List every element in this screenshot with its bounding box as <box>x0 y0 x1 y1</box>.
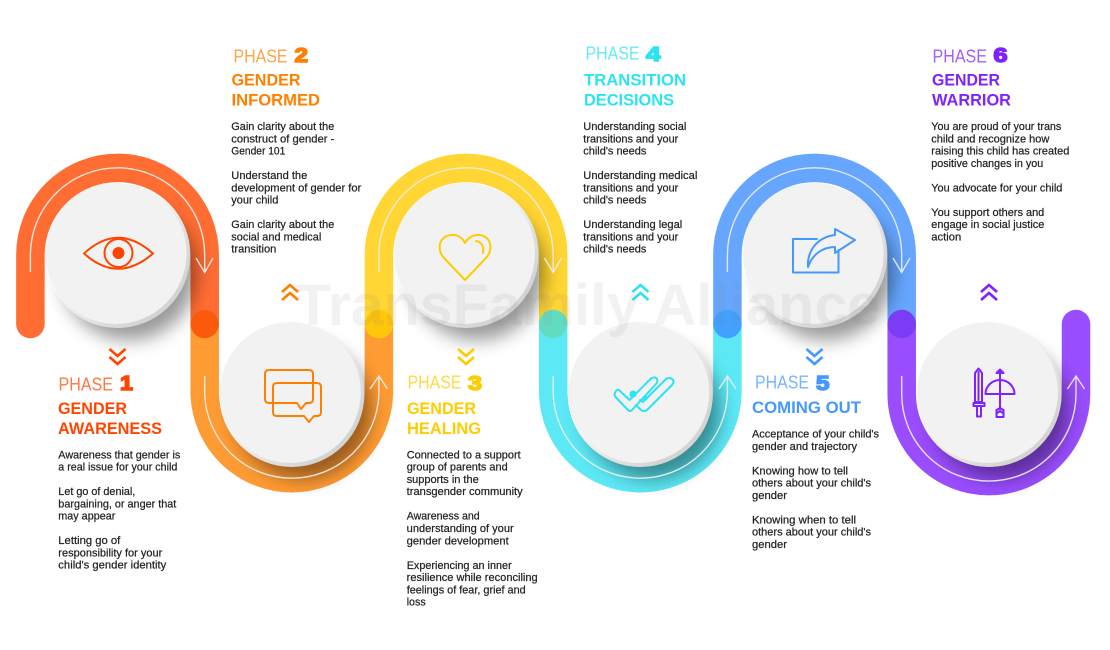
phase 3 body: supports in the <box>407 474 479 486</box>
phase 5 text <box>752 372 879 551</box>
phase 1 text <box>58 373 181 572</box>
phase 4 body: child's needs <box>583 195 647 207</box>
phase 4 heading: DECISIONS <box>584 90 674 110</box>
phase 5 body: others about your child's <box>752 478 871 490</box>
chevrons: phase 3 <box>458 349 474 364</box>
phase 6 heading: WARRIOR <box>932 90 1011 110</box>
icon: speech bubbles <box>265 370 321 422</box>
phase 4 label: PHASE <box>586 44 640 64</box>
phase 2 body: Gender 101 <box>231 146 285 158</box>
arrow line: phase 6 <box>902 376 1084 481</box>
phase 3 body: group of parents and <box>407 462 508 474</box>
phase 3 label: 3 <box>468 373 482 395</box>
icon: sword and arrow <box>974 368 1014 417</box>
icon: eye <box>84 238 153 269</box>
chevrons: phase 1 <box>110 349 126 364</box>
phase 6 body: child and recognize how <box>931 133 1049 145</box>
arrow line: phase 3 <box>379 168 562 272</box>
path band: phase 1 <box>30 168 205 324</box>
phase 2 body: your child <box>231 195 278 207</box>
phase 3 text <box>407 372 538 609</box>
phase 3 heading: GENDER <box>407 399 476 418</box>
phase 3 body: Awareness and <box>407 511 480 523</box>
phase 2 body: development of gender for <box>231 182 362 194</box>
phase 5 body: others about your child's <box>752 527 871 539</box>
band junction: orange-yellow <box>365 310 393 338</box>
phase 4 body: Understanding legal <box>583 219 682 231</box>
phase 3 body: Experiencing an inner <box>407 560 512 572</box>
icon: double check <box>614 377 674 411</box>
path band: phase 2 <box>205 324 379 478</box>
phase 1 body: Awareness that gender is <box>58 449 181 461</box>
disc: phase 5 <box>742 183 887 328</box>
phase 1 label: 1 <box>120 373 133 395</box>
phase 2 body <box>231 121 362 256</box>
phase 3 body: feelings of fear, grief and <box>407 584 526 596</box>
phase 4 text <box>583 44 697 256</box>
chevrons: phase 4 <box>632 285 648 300</box>
phase 4 body: transitions and your <box>583 231 679 243</box>
phase 5 label: 5 <box>816 373 830 395</box>
phase 2 label: PHASE <box>234 46 288 66</box>
phase 6 body: You advocate for your child <box>931 182 1062 194</box>
phase 3 heading: HEALING <box>407 419 481 438</box>
phase 5 label: PHASE <box>755 372 809 392</box>
phase 6 heading <box>932 70 1011 110</box>
arrow line: phase 2 <box>205 376 388 478</box>
phase 4 body: transitions and your <box>583 182 679 194</box>
phase 6 heading: GENDER <box>932 70 1000 90</box>
phase 2 heading <box>232 70 320 110</box>
phase 3 body: understanding of your <box>407 523 514 535</box>
phase 2 body: Gain clarity about the <box>231 219 334 231</box>
phase 5 body: Knowing how to tell <box>752 465 848 477</box>
phase 6 body: action <box>931 232 961 244</box>
phase 4 body: child's needs <box>583 244 647 256</box>
disc: phase 1 <box>45 183 190 328</box>
phase 2 body: transition <box>231 244 276 256</box>
phase 1 body: bargaining, or anger that <box>58 498 176 510</box>
phase 2 heading: GENDER <box>232 70 300 90</box>
phase 5 body: Acceptance of your child's <box>752 429 879 441</box>
phase 1 heading: AWARENESS <box>58 419 162 438</box>
path band: phase 4 <box>553 324 727 478</box>
phase 1 heading: GENDER <box>58 399 127 418</box>
phase 5 heading: COMING OUT <box>752 398 862 417</box>
phase 3 body: resilience while reconciling <box>407 572 538 584</box>
phase 1 body <box>58 449 181 572</box>
disc: phase 2 <box>219 322 364 467</box>
phase 1 body: a real issue for your child <box>58 462 177 474</box>
path band: phase 6 <box>902 324 1076 481</box>
phase 4 body: child's needs <box>583 146 647 158</box>
phase 4 body: Understanding medical <box>583 170 697 182</box>
phase 1 body: Letting go of <box>58 535 121 547</box>
phase 4 label: 4 <box>646 44 662 66</box>
phase 4 body: Understanding social <box>583 121 686 133</box>
phase 3 body: transgender community <box>407 486 523 498</box>
phase 1 label: PHASE <box>58 374 113 394</box>
phase 5 body: gender and trajectory <box>752 441 858 453</box>
phase 3 heading <box>407 399 481 438</box>
phase 6 body: You are proud of your trans <box>931 121 1062 133</box>
phase 6 body: engage in social justice <box>931 219 1044 231</box>
disc: phase 6 <box>916 322 1061 467</box>
watermark: TransFamily Alliance <box>295 273 880 338</box>
phase 6 body: You support others and <box>931 207 1044 219</box>
phase 6 body: positive changes in you <box>931 158 1043 170</box>
phase 6 label: PHASE <box>932 46 987 66</box>
phase 6 text <box>931 45 1069 244</box>
phase 3 label: PHASE <box>408 372 462 392</box>
circle shadows <box>61 204 1068 479</box>
path band: phase 3 <box>379 168 553 324</box>
phase 3 body: Connected to a support <box>407 449 521 461</box>
chevrons: phase 5 <box>806 349 822 364</box>
phase 2 body: social and medical <box>231 231 321 243</box>
phase 5 body <box>752 429 879 551</box>
path band: phase 5 <box>727 168 902 324</box>
arrow line: phase 1 <box>30 168 213 272</box>
phase 5 body: gender <box>752 539 787 551</box>
chevrons: phase 2 <box>282 285 298 300</box>
phase 4 body: transitions and your <box>583 133 679 145</box>
phase 3 body <box>407 449 538 609</box>
phase 2 body: construct of gender - <box>231 133 335 145</box>
phase 3 body: gender development <box>407 535 509 547</box>
phase 1 body: child's gender identity <box>58 560 167 572</box>
phase 2 body: Gain clarity about the <box>231 121 334 133</box>
icon: share arrow <box>793 229 855 272</box>
phase 2 heading: INFORMED <box>232 90 320 110</box>
phase 6 body <box>931 121 1069 244</box>
arrow line: phase 5 <box>727 168 910 272</box>
phase 1 body: Let go of denial, <box>58 486 135 498</box>
phase 6 body: raising this child has created <box>931 146 1069 158</box>
phase 1 heading <box>58 399 162 438</box>
band junction: yellow-cyan <box>539 310 567 338</box>
phase 4 heading <box>584 70 686 110</box>
phase 5 body: Knowing when to tell <box>752 514 856 526</box>
band junction: blue-purple <box>888 310 916 338</box>
phase 4 heading: TRANSITION <box>584 70 686 90</box>
phase 6 label: 6 <box>994 45 1008 67</box>
phase 2 body: Understand the <box>231 170 307 182</box>
phase 1 body: may appear <box>58 511 116 523</box>
phase 4 body <box>583 121 697 256</box>
band junction: red-orange <box>190 310 219 338</box>
arrow line: phase 4 <box>553 376 736 478</box>
phase 5 body: gender <box>752 490 787 502</box>
phase 2 label: 2 <box>294 45 308 67</box>
phase 1 body: responsibility for your <box>58 547 163 559</box>
disc: phase 3 <box>394 183 538 328</box>
disc: phase 4 <box>568 322 713 467</box>
phase 2 text <box>231 45 362 256</box>
chevrons: phase 6 <box>981 285 997 300</box>
phase 3 body: loss <box>407 597 426 609</box>
band junction: cyan-blue <box>713 310 742 338</box>
icon: heart <box>440 235 490 280</box>
